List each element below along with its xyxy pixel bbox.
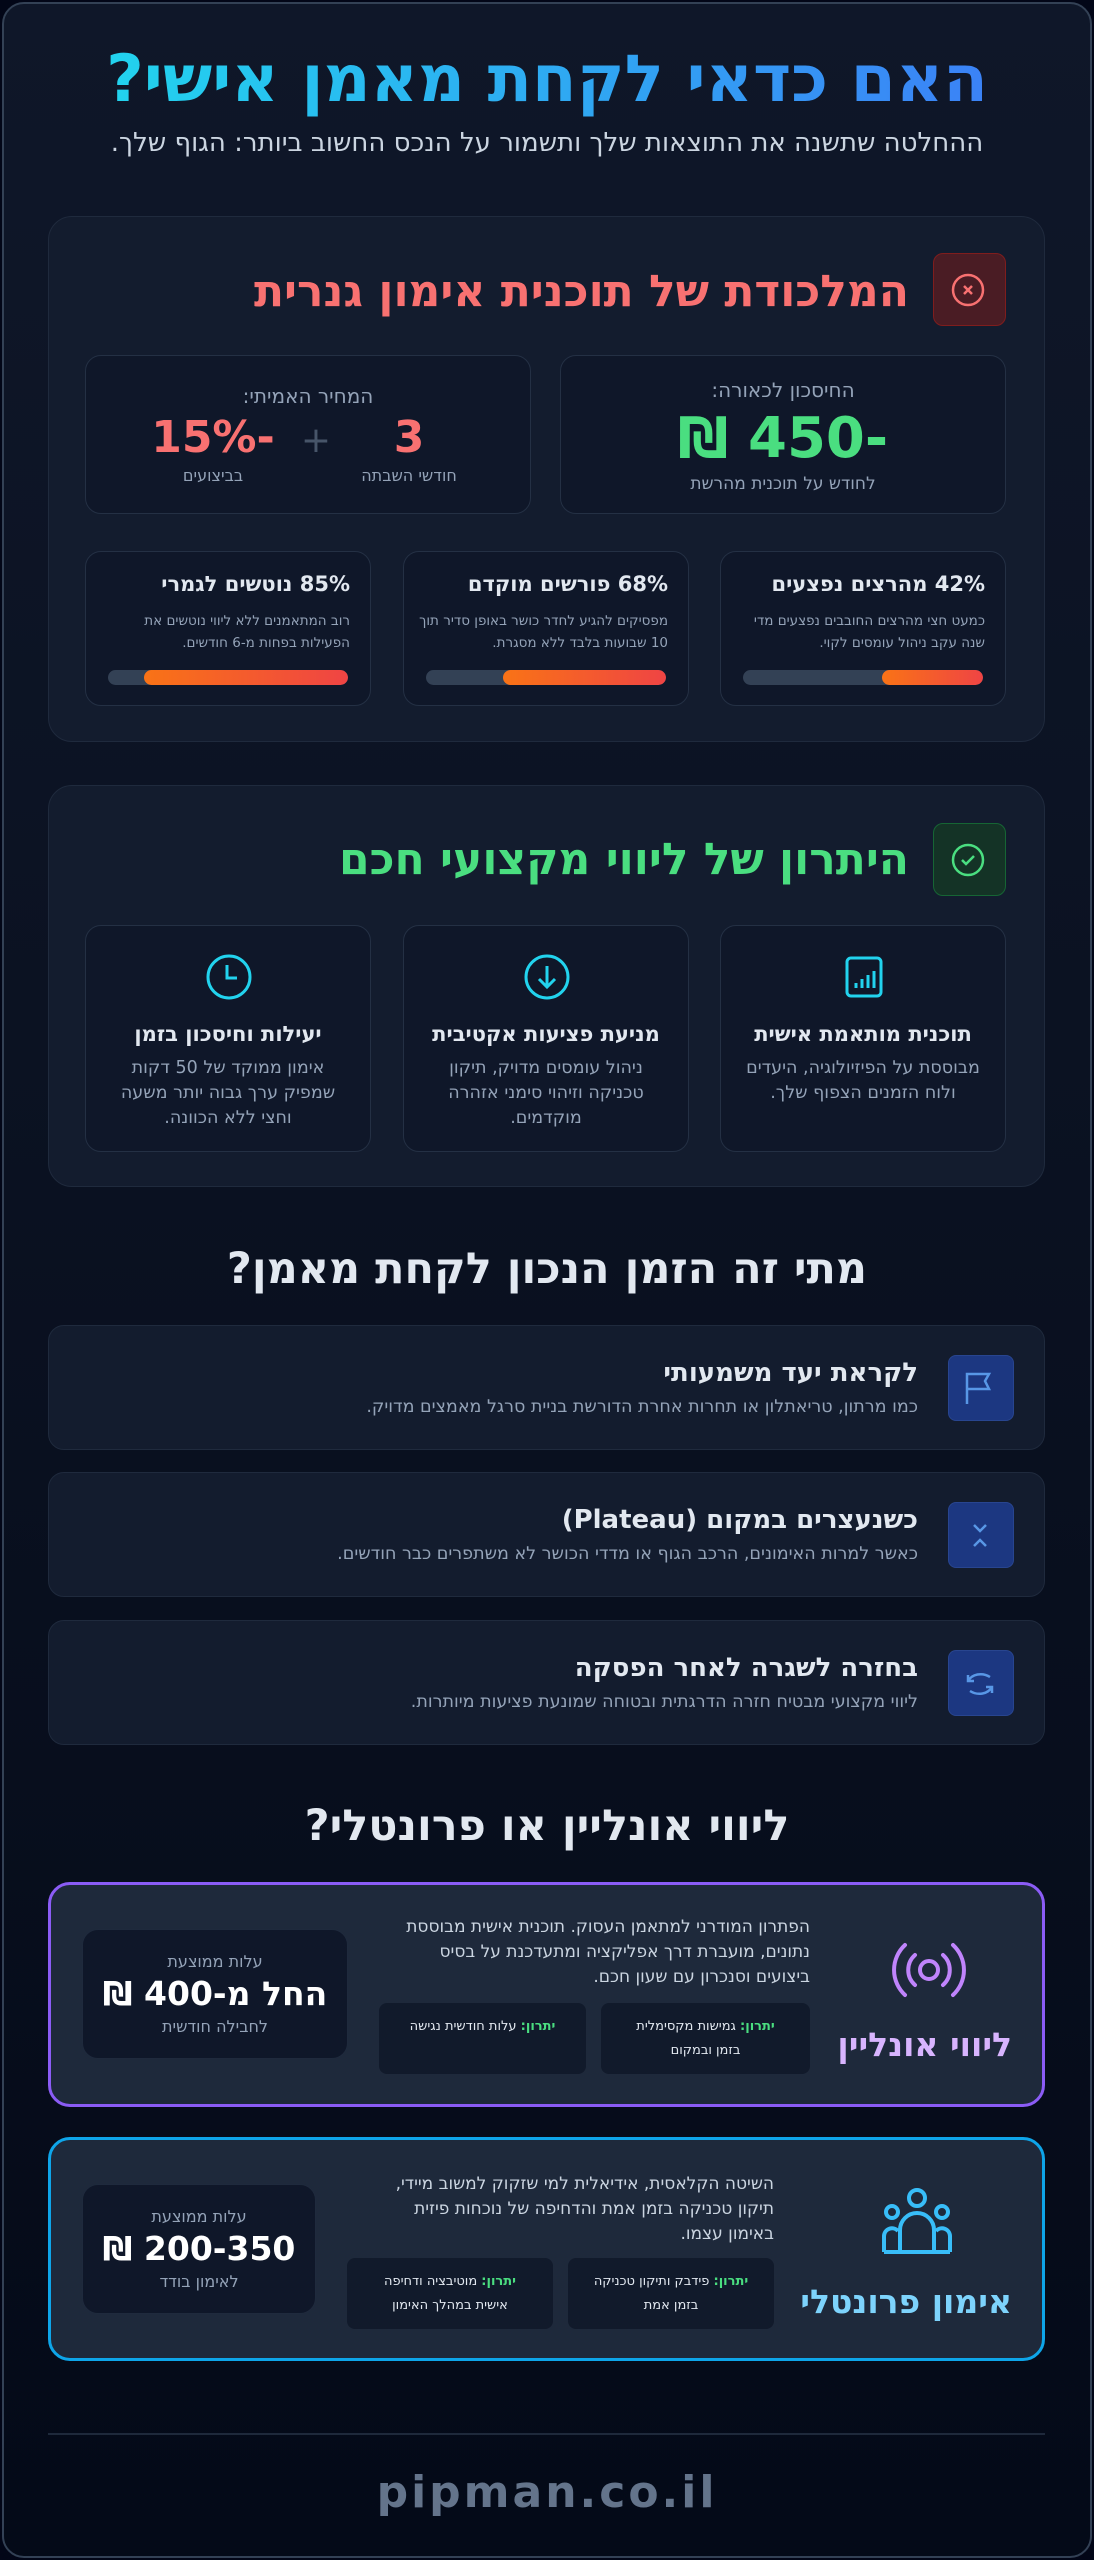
footer: site name: pipman.co.il <box>377 2467 717 2518</box>
price box: עלות ממוצעת <box>167 1952 263 1971</box>
card: personal plan: מבוססת על הפיזיולוגיה, היעדים ולוח הזמנים הצפוף שלך. <box>746 1058 980 1103</box>
stat: apparent saving <box>560 355 1006 514</box>
card: injury prevention: מניעת פציעות אקטיבית <box>432 1022 660 1046</box>
stat card: runners injured: כמעט חצי מהרצים החובבים נפצעים מדי שנה עקב ניהול עומסים לקוי. <box>754 613 985 651</box>
card: injury prevention: ניהול עומסים מדויק, תיקון טכניקה וזיהוי סימני אזהרה מוקדמים. <box>448 1058 644 1128</box>
card: online coaching: יתרון: עלות חודשית נגישה <box>410 2019 555 2034</box>
stat card: runners injured <box>720 551 1006 706</box>
heading: היתרון של ליווי מקצועי חכם <box>339 834 909 885</box>
row: comeback: ליווי מקצועי מבטיח חזרה הדרגתית ובטוחה שמונעת פציעות מיותרות. <box>411 1692 918 1712</box>
price box: לחבילה חודשית <box>162 2017 268 2036</box>
stat card: abandon <box>85 551 371 706</box>
card: frontal coaching: אימון פרונטלי <box>800 2282 1012 2321</box>
description: השיטה הקלאסית, אידיאלית למי שזקוק למשוב מיידי, תיקון טכניקה בזמן אמת והדחיפה של נוכחות פיזית באימון עצמו. <box>396 2174 774 2244</box>
stat card: early quitters: מפסיקים להגיע לחדר כושר באופן סדיר תוך 10 שבועות בלבד ללא מסגרת. <box>419 613 668 651</box>
stat: real price: בביצועים <box>183 466 243 485</box>
icon: broadcast <box>892 1942 966 1998</box>
price box: החל מ-400 ₪ <box>103 1974 327 2013</box>
row: goal: לקראת יעד משמעותי <box>663 1358 918 1388</box>
card: time efficiency: אימון ממוקד של 50 דקות שמפיק ערך גבוה יותר משעה וחצי ללא הכוונה. <box>121 1058 335 1128</box>
stat card: early quitters: 68% פורשים מוקדם <box>468 572 668 596</box>
advantage boxes <box>601 2003 810 2074</box>
card: frontal coaching <box>48 2137 1045 2361</box>
card: time efficiency: יעילות וחיסכון בזמן <box>134 1022 322 1046</box>
advantage boxes: יתרון: גמישות מקסימלית <box>636 2019 775 2034</box>
card: personal plan: תוכנית מותאמת אישית <box>754 1022 972 1046</box>
heading: המלכודת של תוכנית אימון גנרית <box>254 266 909 317</box>
icon: flag <box>948 1355 1014 1421</box>
row: plateau: כאשר למרות האימונים, הרכב הגוף או מדדי הכושר לא משתפרים כבר חודשים. <box>337 1544 918 1564</box>
panel: professional advantage <box>48 785 1045 1187</box>
row: goal <box>48 1325 1045 1450</box>
icon: group <box>882 2188 952 2254</box>
stat: real price: 3 <box>394 412 424 463</box>
price box: עלות ממוצעת <box>151 2207 247 2226</box>
card: frontal coaching: אישית במהלך האימון <box>392 2298 508 2313</box>
stat: real price <box>85 355 531 514</box>
price box <box>82 1929 348 2059</box>
stat: real price: חודשי השבתה <box>361 466 457 485</box>
row: comeback <box>48 1620 1045 1745</box>
card: frontal coaching: יתרון: מוטיבציה ודחיפה <box>384 2274 516 2289</box>
stat card: early quitters <box>403 551 689 706</box>
stat card: abandon: רוב המתאמנים ללא ליווי נוטשים את הפעילות בפחות מ-6 חודשים. <box>144 613 350 651</box>
icon: compress <box>948 1502 1014 1568</box>
price box: לאימון בודד <box>159 2272 239 2291</box>
stat: apparent saving: החיסכון לכאורה: <box>711 378 855 402</box>
panel: generic plan trap <box>48 216 1045 742</box>
stat card: abandon: 85% נוטשים לגמרי <box>161 572 350 596</box>
stat: real price: המחיר האמיתי: <box>243 384 373 408</box>
card: injury prevention <box>403 925 689 1152</box>
row: plateau <box>48 1472 1045 1597</box>
stat card: runners injured: 42% מהרצים נפצעים <box>772 572 985 596</box>
stat: apparent saving: לחודש על תוכנית מהרשת <box>690 474 876 494</box>
icon: check circle <box>933 823 1006 896</box>
icon: return arrows <box>948 1650 1014 1716</box>
stat: real price: 15%- <box>151 412 275 463</box>
stat: apparent saving: ₪ 450- <box>678 406 888 471</box>
advantage boxes: יתרון: פידבק ותיקון טכניקה <box>594 2274 748 2289</box>
advantage boxes <box>568 2258 774 2329</box>
row: comeback: בחזרה לשגרה לאחר הפסקה <box>575 1653 918 1683</box>
price box <box>82 2184 316 2314</box>
row: plateau: כשנעצרים במקום (Plateau) <box>562 1505 918 1535</box>
advantage boxes: בזמן ובמקום <box>671 2043 740 2058</box>
card: personal plan <box>720 925 1006 1152</box>
subtitle: ההחלטה שתשנה את התוצאות שלך ותשמור על הנכס החשוב ביותר: הגוף שלך. <box>111 128 983 158</box>
card: online coaching <box>48 1882 1045 2107</box>
card: time efficiency <box>85 925 371 1152</box>
advantage boxes: בזמן אמת <box>644 2298 698 2313</box>
price box: ₪ 200-350 <box>103 2229 295 2268</box>
stat: real price: + <box>301 420 331 461</box>
section heading: online vs frontal: ליווי אונליין או פרונטלי? <box>305 1801 789 1851</box>
title: האם כדאי לקחת מאמן אישי? <box>106 42 988 117</box>
icon: x circle <box>933 253 1006 326</box>
section heading: when: מתי זה הזמן הנכון לקחת מאמן? <box>227 1244 867 1294</box>
card: online coaching: ליווי אונליין <box>837 2025 1012 2064</box>
row: goal: כמו מרתון, טריאתלון או תחרות אחרת הדורשת בניית סרגל מאמצים מדויק. <box>366 1397 918 1417</box>
description: הפתרון המודרני למתאמן העסוק. תוכנית אישית מבוססת נתונים, מועברת דרך אפליקציה ומתעדכנת על בסיס ביצועים וסנכרון עם שעון חכם. <box>406 1917 810 1987</box>
